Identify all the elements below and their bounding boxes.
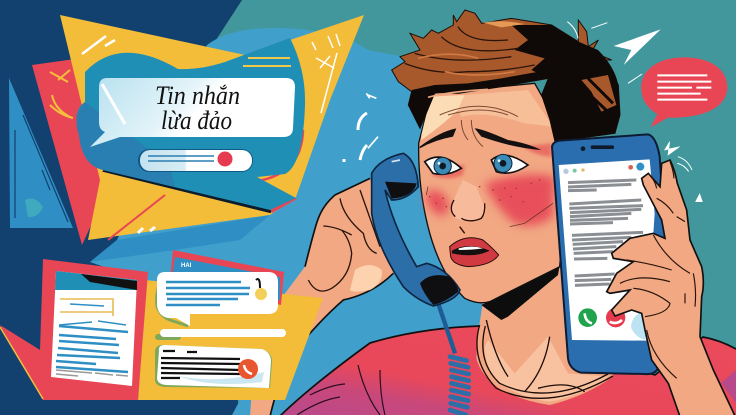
right eye bbox=[491, 154, 528, 173]
background: navy wedge bbox=[0, 0, 242, 415]
hand and forearm holding the handset bbox=[250, 178, 393, 415]
mouth bbox=[450, 238, 499, 267]
brows bbox=[420, 128, 541, 150]
message card: top bbox=[157, 272, 278, 326]
handset and cord bbox=[372, 153, 469, 415]
neck highlight bbox=[485, 337, 608, 402]
panel: blue triangle bbox=[9, 78, 73, 228]
motion sparks: left bbox=[366, 93, 378, 148]
panel: red phone card bbox=[0, 259, 148, 400]
blue strip under the yellow sheet bbox=[90, 215, 270, 262]
message text lines bbox=[568, 180, 643, 285]
panel: teal speech cloud bbox=[77, 38, 305, 213]
nose bbox=[450, 180, 485, 233]
background: blue shape bbox=[90, 28, 600, 415]
forehead mid tone bbox=[458, 90, 553, 127]
message card: bottom bbox=[155, 345, 272, 388]
smartphone bbox=[552, 134, 665, 374]
person and foreground bbox=[366, 10, 727, 405]
icon: paper plane bbox=[614, 29, 661, 65]
forehead highlight bbox=[421, 95, 465, 140]
headline: Tin nhắn bbox=[155, 81, 240, 110]
star and drop sparks bbox=[665, 142, 702, 202]
left eye bbox=[425, 157, 461, 175]
phone screen bbox=[51, 271, 137, 386]
chin shadow bbox=[481, 265, 560, 320]
phone screen bbox=[559, 159, 655, 341]
call buttons bbox=[578, 308, 646, 340]
panel: red back card: HAI bbox=[181, 263, 192, 269]
pill button bbox=[138, 149, 253, 172]
panel: red sheet bbox=[32, 59, 112, 245]
hair bbox=[392, 10, 620, 142]
face bbox=[419, 83, 568, 303]
panel: yellow sheet bbox=[60, 15, 364, 240]
panel: yellow lower sheet bbox=[138, 280, 323, 400]
message card: thin bar bbox=[155, 329, 286, 340]
forehead creases bbox=[440, 106, 518, 147]
neck bbox=[476, 253, 613, 405]
speech bubble: red bbox=[641, 57, 727, 127]
message bubble bbox=[90, 78, 295, 147]
collar bbox=[477, 320, 613, 398]
panel: red back card bbox=[170, 250, 284, 305]
shirt bbox=[280, 326, 736, 415]
hand holding smartphone bbox=[607, 160, 735, 415]
motion sparks near handset bbox=[344, 113, 367, 162]
blush bbox=[426, 143, 555, 227]
headline: lừa đảo bbox=[161, 106, 232, 135]
motion sparks bbox=[567, 22, 692, 172]
